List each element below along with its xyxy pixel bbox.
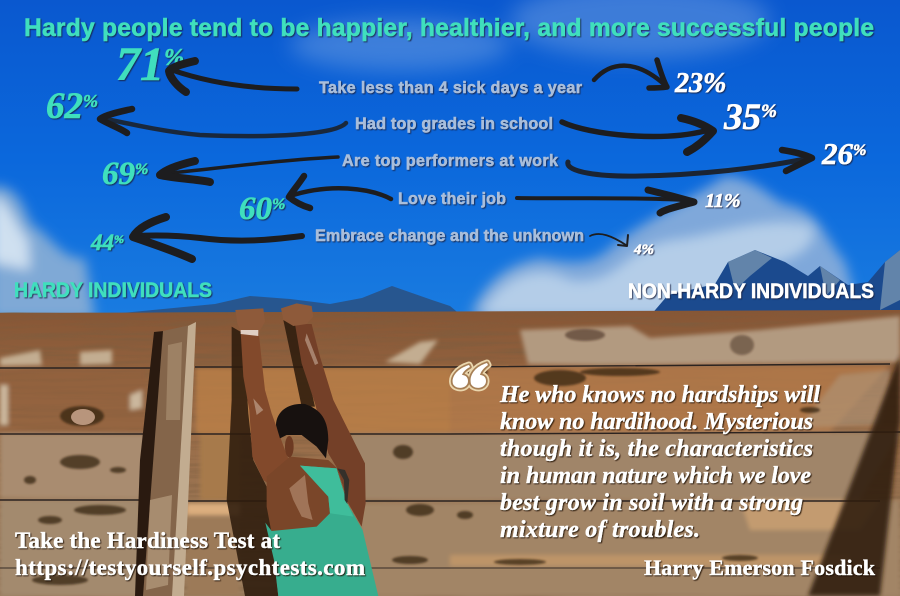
title: Hardy people tend to be happier, healthier, and more successful people (24, 15, 874, 42)
back (267, 457, 362, 533)
arrows toward non-hardy percentages (517, 60, 812, 246)
hardy percentages: % (135, 161, 148, 178)
hardy percentages: % (83, 91, 98, 111)
ear (285, 436, 294, 457)
woman climbing the wall (227, 303, 378, 596)
call to action: Take the Hardiness Test at (15, 528, 280, 553)
non-hardy percentages: 23% (674, 68, 726, 99)
arrows toward hardy percentages (100, 61, 391, 259)
arrow 26 (568, 150, 812, 176)
wooden wall (0, 310, 900, 596)
sweat highlight (253, 333, 318, 415)
diagonal shadow on wall (808, 355, 900, 596)
quote text: know no hardihood. Mysterious (500, 409, 813, 435)
call to action (15, 528, 365, 580)
arrow 62 (100, 109, 346, 136)
row labels: Love their job (398, 190, 506, 208)
quote text: in human nature which we love (500, 463, 811, 489)
quote text: mixture of troubles. (500, 517, 700, 543)
non-hardy percentages: 35 (724, 97, 761, 138)
hardy percentages: 69 (102, 156, 135, 192)
non-hardy percentages: % (853, 142, 866, 159)
quote text: best grow in soil with a strong (500, 490, 803, 516)
wristband (241, 330, 258, 336)
quote attribution: Harry Emerson Fosdick (644, 555, 876, 580)
hands (235, 308, 265, 333)
mountains (90, 250, 900, 316)
arm shadow on wall (227, 320, 315, 596)
row labels: Take less than 4 sick days a year (319, 79, 583, 97)
arrow 44 (133, 217, 302, 259)
wood knot (71, 409, 95, 425)
row labels: Are top performers at work (342, 152, 559, 170)
hardy percentages: 71 (116, 38, 164, 91)
hardy percentages: % (114, 232, 124, 246)
right arm (295, 324, 366, 527)
hardy percentages: 60 (239, 191, 272, 227)
wooden post and shadow (135, 322, 196, 596)
row labels: Embrace change and the unknown (315, 227, 584, 245)
arrow 69 (160, 157, 338, 182)
top strap (337, 468, 349, 504)
arrow 4 (590, 234, 628, 246)
hardy percentages (46, 38, 285, 255)
non-hardy percentages (633, 68, 866, 258)
arrow 23 (594, 60, 667, 88)
non-hardy percentages: 26 (822, 136, 853, 171)
hardy percentages: 62 (46, 86, 83, 127)
non-hardy percentages: % (761, 101, 777, 122)
non-hardy individuals label: NON-HARDY INDIVIDUALS (628, 280, 874, 303)
call to action: https://testyourself.psychtests.com (15, 555, 365, 580)
arrow 35 (562, 118, 713, 152)
arrow 71 (169, 61, 297, 92)
hardy percentages: 44 (91, 230, 114, 255)
arrow 60 (289, 176, 391, 208)
quote text: though it is, the characteristics (500, 436, 813, 462)
non-hardy percentages: 4% (633, 242, 654, 258)
row labels (315, 79, 584, 245)
quote text (499, 382, 820, 543)
hardy percentages: % (272, 196, 285, 213)
quote text: He who knows no hardships will (499, 382, 820, 408)
clouds (0, 0, 860, 320)
hair (276, 404, 328, 458)
left arm (241, 332, 295, 488)
hardy percentages: % (164, 45, 184, 71)
row labels: Had top grades in school (355, 115, 553, 133)
sky background (0, 0, 900, 320)
non-hardy percentages: 11% (705, 190, 741, 212)
hardy individuals label: HARDY INDIVIDUALS (14, 279, 212, 302)
arrow 11 (517, 190, 694, 213)
sweat on back (289, 475, 313, 520)
icon: quotation mark (453, 363, 488, 388)
tank top (265, 466, 378, 596)
